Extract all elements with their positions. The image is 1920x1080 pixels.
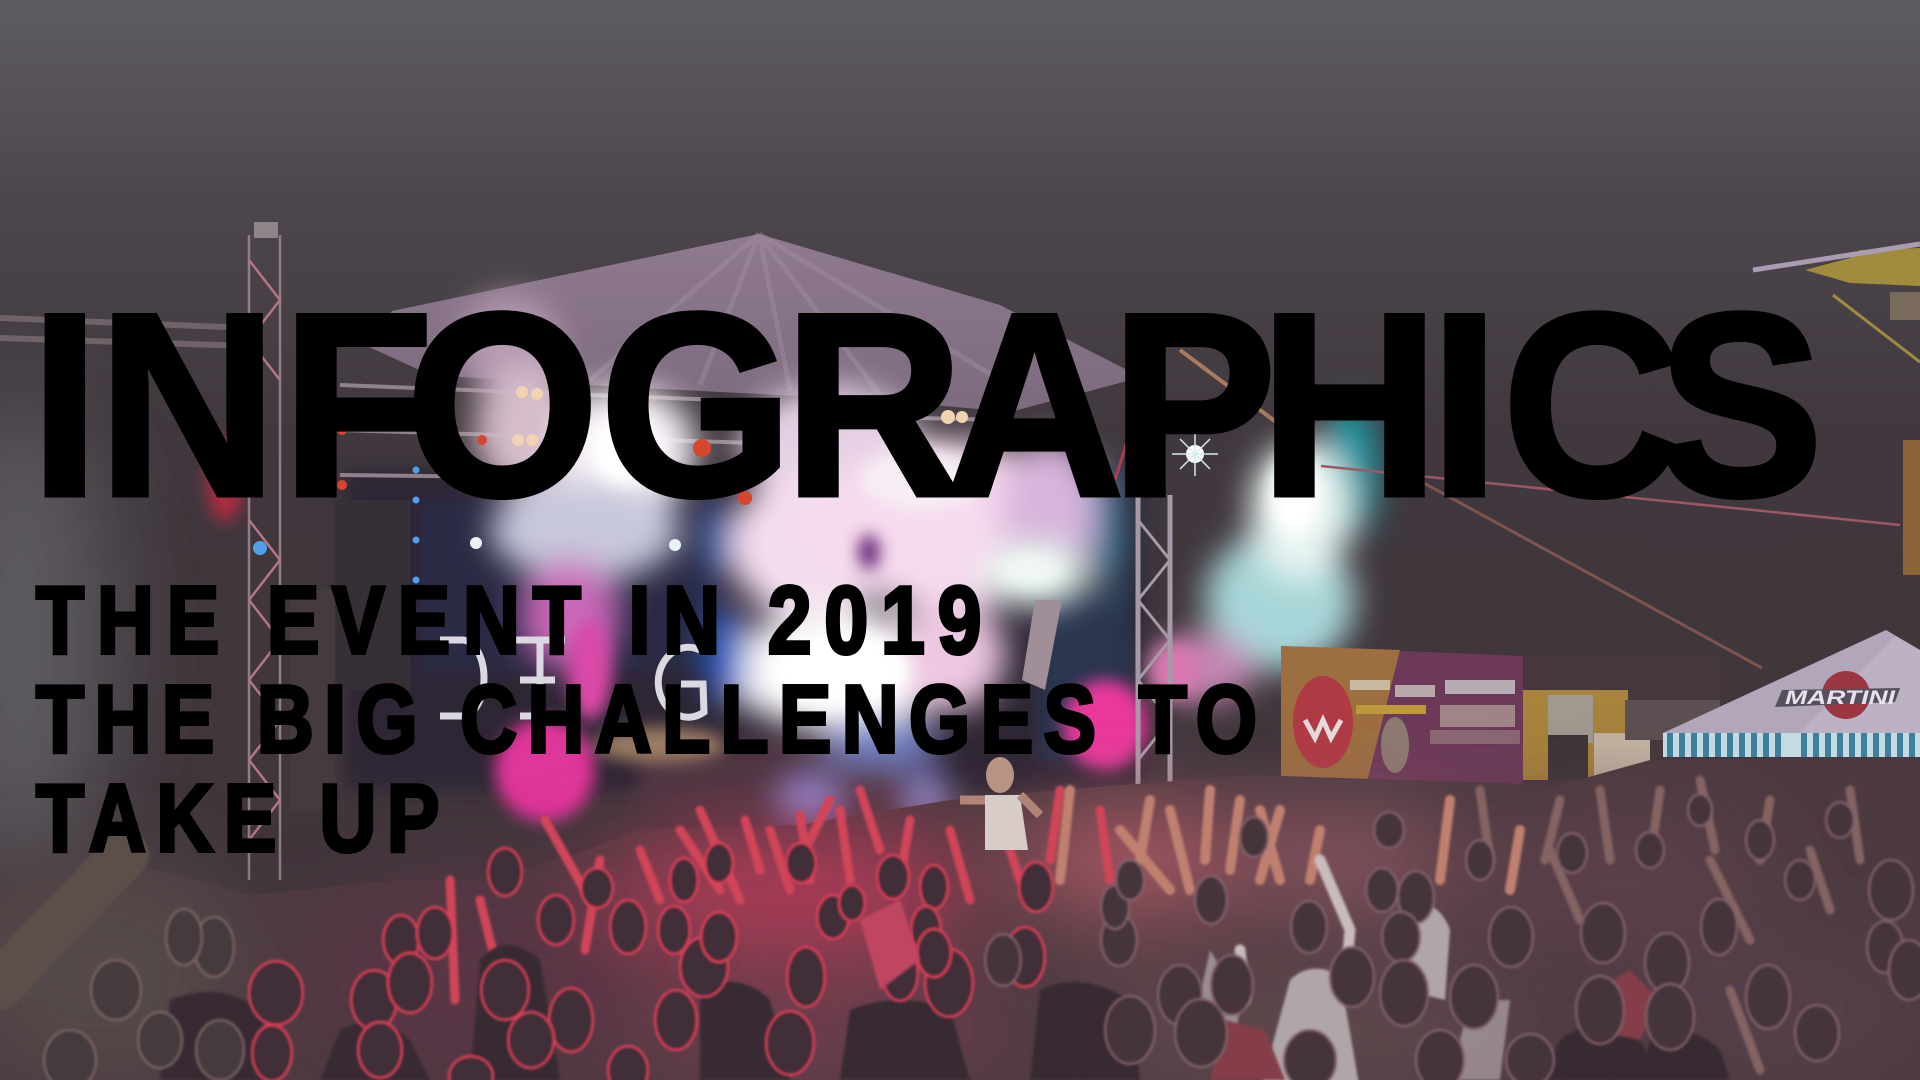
- performer on stage: [960, 757, 1040, 850]
- stage truss under the tent: [340, 385, 1000, 480]
- background: grey vignette on the left: [0, 400, 110, 880]
- crowd: heads, far left in shadow: [44, 909, 244, 1080]
- crowd: light shirts: [1190, 900, 1510, 1080]
- background: stage dark backdrop: [345, 470, 1145, 810]
- crowd: red shirts: [860, 900, 1660, 1080]
- martini umbrella: MARTINI: [1785, 688, 1896, 709]
- building behind crowd: [1523, 655, 1720, 785]
- stage lights: [253, 386, 1218, 584]
- martini umbrella: [1663, 630, 1920, 757]
- crowd: torsos in shadow: [160, 945, 1730, 1080]
- crowd: heads, centre and right: [985, 794, 1920, 1080]
- stage smoke clouds: [460, 295, 1378, 828]
- left scaffold truss: [0, 222, 280, 880]
- subtitle line 1: THE EVENT IN 2019: [36, 567, 981, 674]
- guy wires: [1115, 350, 1900, 668]
- crowd base: [0, 755, 1920, 1080]
- crowd: heads with stage-light rims, left and centre: [249, 843, 1053, 1080]
- crowd: raised arms: [0, 780, 1860, 1070]
- subtitle line 3: TAKE UP: [36, 765, 439, 872]
- tent roof: [365, 234, 1131, 412]
- right wooden pillar: [1903, 440, 1920, 575]
- upper right lighting rig: [1753, 244, 1920, 362]
- stage screen logo: [440, 640, 704, 718]
- festival billboard: [1281, 646, 1523, 790]
- subtitle: three lines: [36, 567, 1257, 872]
- main title: INFOGRAPHICS: [30, 259, 1823, 550]
- red glow beside the truss: [207, 438, 243, 522]
- stage speakers and equipment: [290, 495, 1170, 810]
- subtitle line 2: THE BIG CHALLENGES TO: [36, 666, 1257, 773]
